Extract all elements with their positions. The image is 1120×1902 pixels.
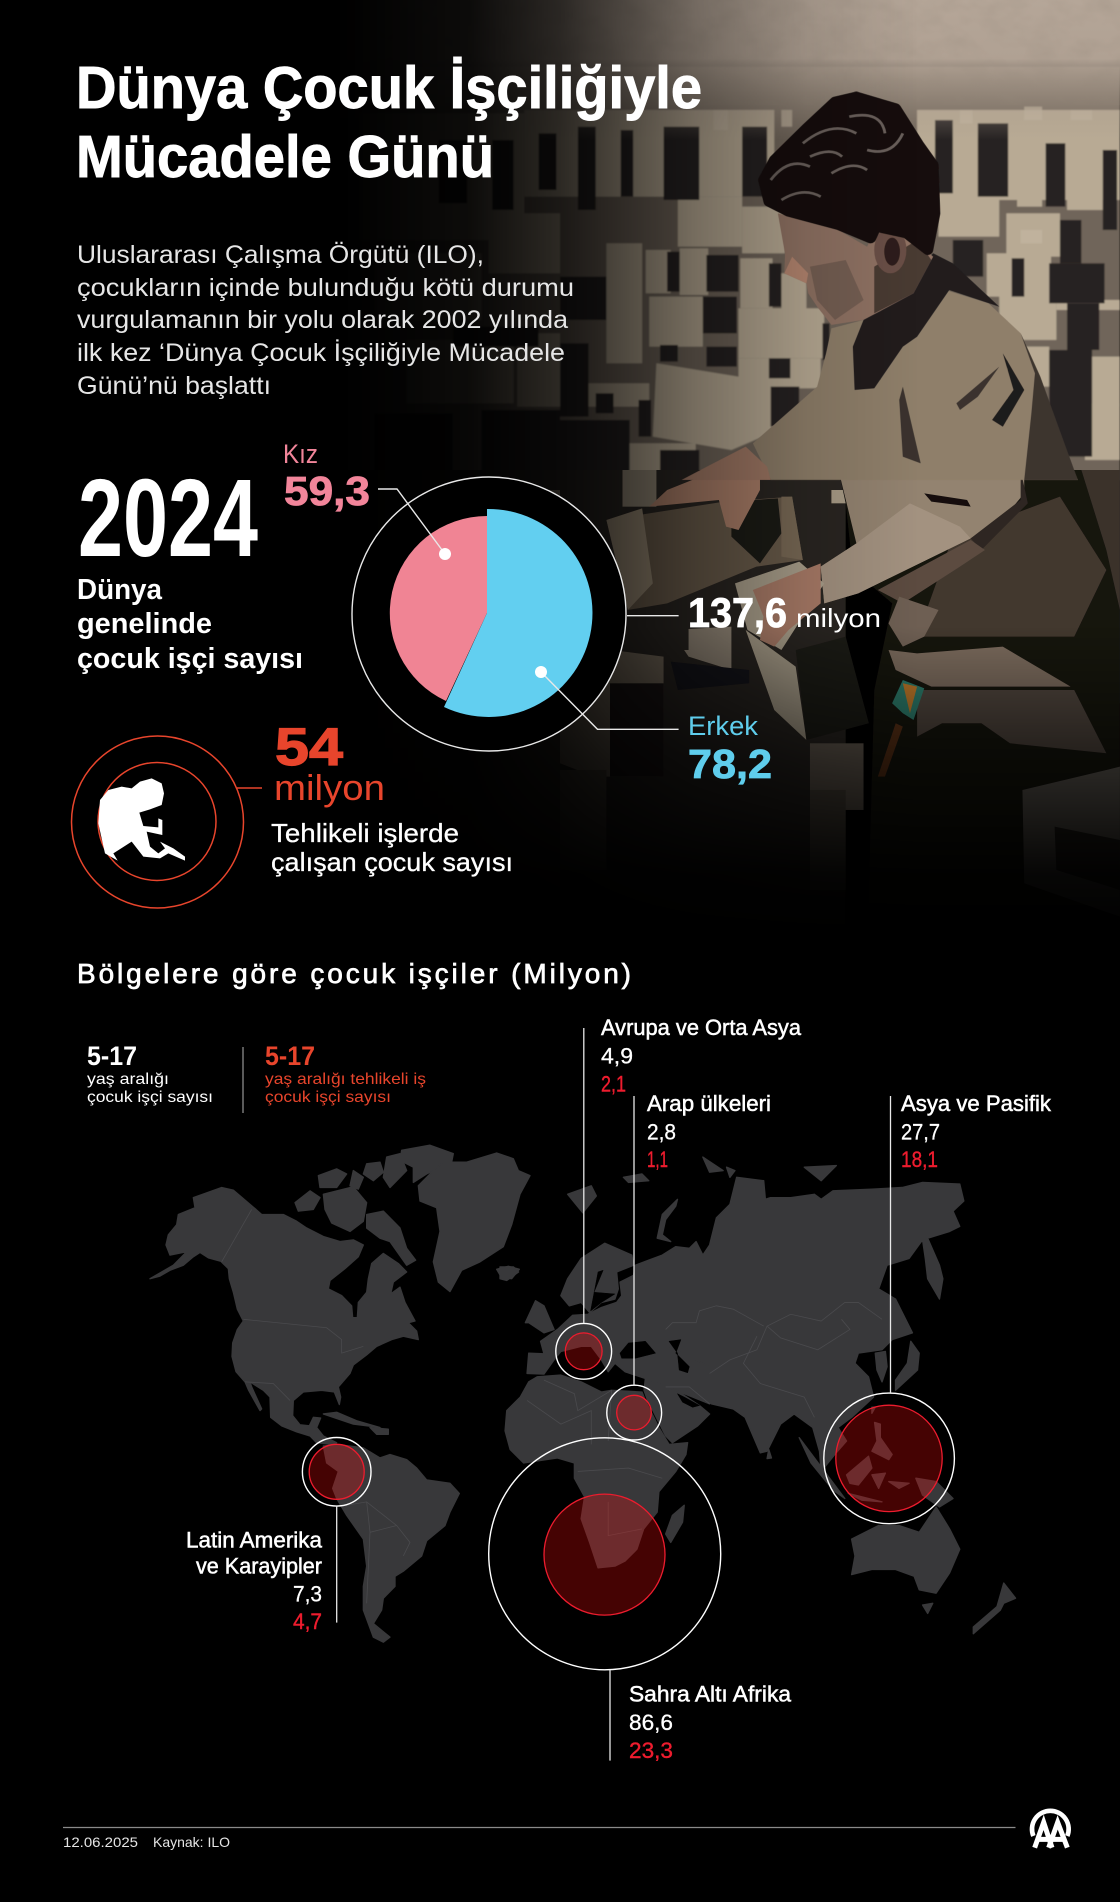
bubble: Europe and Central Asia	[556, 1028, 612, 1379]
subheading: global child labourers: çocuk işçi sayısı	[77, 643, 303, 675]
footer	[63, 1828, 1016, 1850]
footer: 12.06.2025	[63, 1834, 138, 1850]
year headline 2024: 2024	[78, 457, 258, 580]
label: Latin America and Caribbean: 4,7	[293, 1609, 322, 1634]
label: total: 137,6	[688, 589, 787, 636]
label: total: milyon	[796, 603, 881, 633]
hazardous work stat: 54	[275, 718, 344, 777]
intro text block: Günü’nü başlattı	[77, 372, 271, 400]
world map	[150, 1145, 1016, 1642]
label: Latin America and Caribbean	[186, 1528, 323, 1634]
label: girls: 59,3	[284, 468, 370, 514]
intro text block: vurgulamanın bir yolu olarak 2002 yılında	[77, 306, 568, 334]
bubble: Sub-Saharan Africa	[489, 1438, 721, 1761]
bubble: Arab states	[607, 1096, 662, 1440]
label: Asia and Pacific: 18,1	[901, 1147, 938, 1172]
label: Europe and Central Asia	[601, 1015, 802, 1096]
label: Latin America and Caribbean: 7,3	[293, 1582, 322, 1607]
pie chart: girls and boys	[352, 477, 679, 751]
title: Dünya Çocuk İşçiliğiyle	[76, 55, 702, 121]
legend: çocuk işçi sayısı	[87, 1089, 213, 1106]
section heading: regions: Bölgelere göre çocuk işçiler (Milyon)	[77, 958, 631, 989]
footer: Kaynak: ILO	[153, 1834, 230, 1850]
hazardous work stat: çalışan çocuk sayısı	[271, 847, 513, 877]
bubble: Asia and Pacific	[824, 1096, 954, 1524]
intro text block: ilk kez ‘Dünya Çocuk İşçiliğiyle Mücadele	[77, 338, 565, 367]
wall above the brick stacks	[300, 0, 1120, 140]
title: Mücadele Günü	[76, 124, 494, 190]
label: girls	[283, 439, 370, 514]
label: Europe and Central Asia: 2,1	[601, 1072, 626, 1096]
label: Asia and Pacific: 27,7	[901, 1119, 940, 1144]
label: girls: Kız	[283, 439, 318, 469]
intro text block: çocukların içinde bulunduğu kötü durumu	[77, 274, 574, 302]
label: Sub-Saharan Africa	[629, 1682, 792, 1763]
legend: yaş aralığı	[87, 1071, 169, 1088]
label: Europe and Central Asia: 4,9	[601, 1044, 633, 1068]
icon: child at hazardous work	[72, 736, 262, 908]
label: total	[688, 589, 881, 636]
hazardous work stat	[271, 718, 513, 877]
hazardous work stat: Tehlikeli işlerde	[271, 818, 459, 848]
label: Europe and Central Asia: Avrupa ve Orta Asya	[601, 1015, 802, 1040]
label: Arab states: 1,1	[647, 1147, 668, 1172]
legend: yaş aralığı tehlikeli iş	[265, 1071, 426, 1088]
label: Arab states: Arap ülkeleri	[647, 1091, 771, 1116]
subheading: global child labourers: Dünya	[77, 574, 163, 606]
boy lower body, bricks and hands	[346, 470, 1120, 950]
label: Latin America and Caribbean: Latin Amerika	[186, 1528, 323, 1552]
subheading: global child labourers	[77, 574, 303, 675]
label: Arab states	[647, 1091, 771, 1172]
intro text block	[77, 241, 574, 400]
label: Sub-Saharan Africa: 23,3	[629, 1738, 673, 1763]
label: Arab states: 2,8	[647, 1119, 676, 1144]
bubble: Latin America	[302, 1438, 371, 1623]
label: Latin America and Caribbean: ve Karayipler	[196, 1554, 322, 1578]
photo: child carrying bricks	[0, 0, 1120, 950]
legend: çocuk işçi sayısı	[265, 1089, 391, 1106]
hazardous work stat: milyon	[274, 767, 385, 808]
label: Asia and Pacific: Asya ve Pasifik	[901, 1091, 1052, 1116]
label: Sub-Saharan Africa: 86,6	[629, 1710, 673, 1735]
subheading: global child labourers: genelinde	[77, 608, 212, 640]
intro text block: Uluslararası Çalışma Örgütü (ILO),	[77, 241, 484, 269]
label: Asia and Pacific	[901, 1091, 1052, 1172]
legend	[87, 1041, 426, 1113]
legend: 5-17	[87, 1041, 137, 1071]
legend: 5-17	[265, 1041, 315, 1071]
icon: AA logo	[1032, 1811, 1069, 1848]
label: boys	[688, 711, 772, 787]
title	[76, 55, 702, 190]
label: boys: Erkek	[688, 711, 758, 741]
label: Sub-Saharan Africa: Sahra Altı Afrika	[629, 1682, 792, 1707]
boy upper body	[681, 97, 1078, 480]
label: boys: 78,2	[688, 741, 772, 787]
